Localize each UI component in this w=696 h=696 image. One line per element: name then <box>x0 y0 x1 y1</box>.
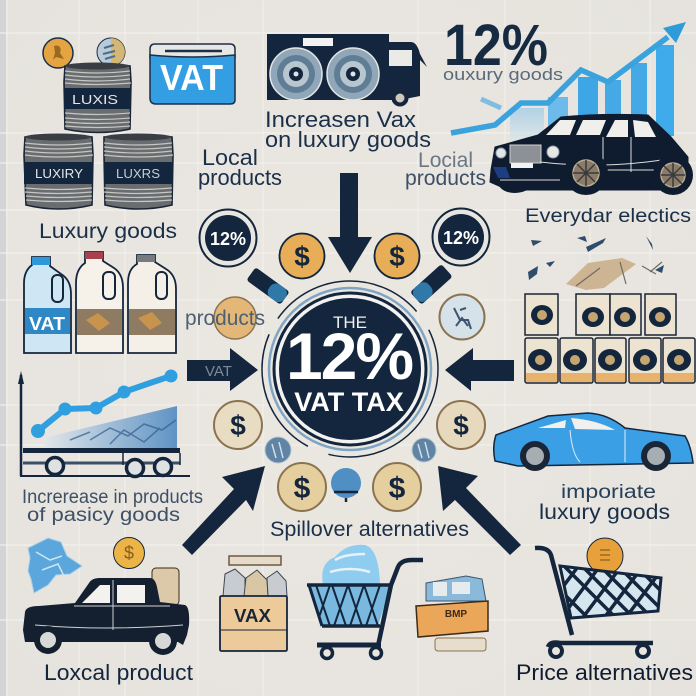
text: increase in products: Increrease in products <box>22 487 203 508</box>
icon: coin lower center left: $ <box>294 472 311 505</box>
chart: rising blue bars and arrow <box>451 22 686 143</box>
text: locial products right <box>405 149 486 190</box>
icon: coin top left: $ <box>294 241 310 272</box>
icon: pill left <box>246 267 290 305</box>
icon: coin lower left: $ <box>230 410 246 441</box>
icon: tan coin behind products <box>214 297 256 339</box>
icon: 12% badge right: 12% <box>443 228 479 248</box>
text: increase vax on luxury goods <box>265 107 431 152</box>
icon: gold coin on barrels <box>43 38 73 68</box>
text: increase in products <box>22 487 203 526</box>
icon: tin cans stack <box>525 294 695 383</box>
icon: silver coin on barrels <box>97 38 125 66</box>
text: important luxury goods: luxury goods <box>539 501 670 524</box>
arrow: left VAT: VAT <box>205 363 232 380</box>
icon: globe center <box>331 468 361 502</box>
text: important luxury goods <box>539 482 670 524</box>
barrel: bottom left <box>24 134 93 209</box>
icon: milk jug red cap <box>76 252 123 353</box>
icon: tan coin on cart <box>587 538 623 574</box>
text: 12% headline: ouxury goods <box>443 65 563 84</box>
central badge: the 12% VAT tax: 12% <box>286 319 412 393</box>
icon: small globe left <box>265 437 291 463</box>
icon: coin lower left <box>214 401 262 449</box>
text: locial products right: products <box>405 167 486 190</box>
icon: debris above cans <box>528 236 664 290</box>
text: luxury goods: Luxury goods <box>39 220 177 243</box>
arrow: lower right diagonal <box>438 466 521 555</box>
icon: pill right <box>410 264 453 305</box>
central badge: the 12% VAT tax: THE <box>333 313 367 332</box>
icon: coin lower right <box>437 401 485 449</box>
icon: VAX box with goods: VAX <box>234 606 271 626</box>
icon: coin lower center right: $ <box>389 472 406 505</box>
text: locial products right: Locial <box>418 149 473 172</box>
chart: line on truck <box>18 370 190 476</box>
icon: coin lower center right <box>373 463 421 511</box>
text: increase vax on luxury goods: Increasen Vax <box>265 107 416 132</box>
icon: coin above truck: $ <box>124 543 134 563</box>
icon: VAX box with goods <box>220 556 287 651</box>
icon: coin top left <box>280 234 324 278</box>
arrow: top down <box>328 173 372 273</box>
icon: black SUV with load <box>23 568 189 655</box>
icon: orange box with package: BMP <box>445 609 467 620</box>
icon: orange box with package <box>416 576 488 651</box>
icon: black luxury car <box>490 114 693 195</box>
icon: shopping cart center <box>307 545 423 658</box>
icon: blue crumpled package <box>28 538 82 593</box>
icon: shopping cart right <box>535 548 675 657</box>
text: increase in products: of pasicy goods <box>27 505 180 526</box>
icon: coin above truck <box>114 538 144 568</box>
icon: small globe right <box>412 438 436 462</box>
icon: blue VAT box <box>150 44 235 104</box>
illustration: stacked luxury barrels <box>24 38 173 209</box>
text: price alternatives: Price alternatives <box>516 660 693 685</box>
icon: VAT water jug <box>24 257 71 353</box>
text: local products left: Local <box>202 145 258 170</box>
icon: blue VAT box: VAT <box>160 57 223 98</box>
central badge: the 12% VAT tax: VAT TAX <box>294 387 404 417</box>
barrel: top: LUXIS <box>72 92 118 107</box>
icon: blue sports car <box>494 413 693 471</box>
icon: 12% badge left <box>200 210 256 266</box>
icon: globe coin top right <box>440 294 484 340</box>
icon: coin top right <box>374 234 420 278</box>
arrow: right <box>445 348 514 391</box>
icon: black truck with speakers <box>267 34 427 104</box>
text: 12% headline: 12% <box>444 13 548 78</box>
icon: coin top right: $ <box>389 241 405 272</box>
icon: 12% badge left: 12% <box>210 229 246 249</box>
barrel: bottom right <box>104 134 173 209</box>
text: spillover alternatives: Spillover alternatives <box>270 518 469 541</box>
arrow: left VAT <box>187 348 258 391</box>
barrel: bottom left: LUXIRY <box>35 166 83 181</box>
icon: VAT water jug: VAT <box>29 313 66 334</box>
text: products label: products <box>185 307 265 330</box>
text: everyday electics: Everydar electics <box>525 205 691 227</box>
icon: 12% badge right <box>432 208 490 266</box>
text: local products left <box>198 145 282 190</box>
text: increase vax on luxury goods: on luxury goods <box>265 127 431 152</box>
text: local product: Loxcal product <box>44 660 193 685</box>
text: local products left: products <box>198 165 282 190</box>
barrel: bottom right: LUXRS <box>116 166 160 181</box>
icon: coin lower right: $ <box>453 410 469 441</box>
text: important luxury goods: imporiate <box>561 482 656 503</box>
arrow: lower left diagonal <box>182 466 265 555</box>
icon: coin lower center left <box>278 463 326 511</box>
central badge: the 12% VAT tax <box>262 281 438 457</box>
icon: milk jug grey cap <box>128 255 176 353</box>
barrel: top <box>64 62 131 132</box>
